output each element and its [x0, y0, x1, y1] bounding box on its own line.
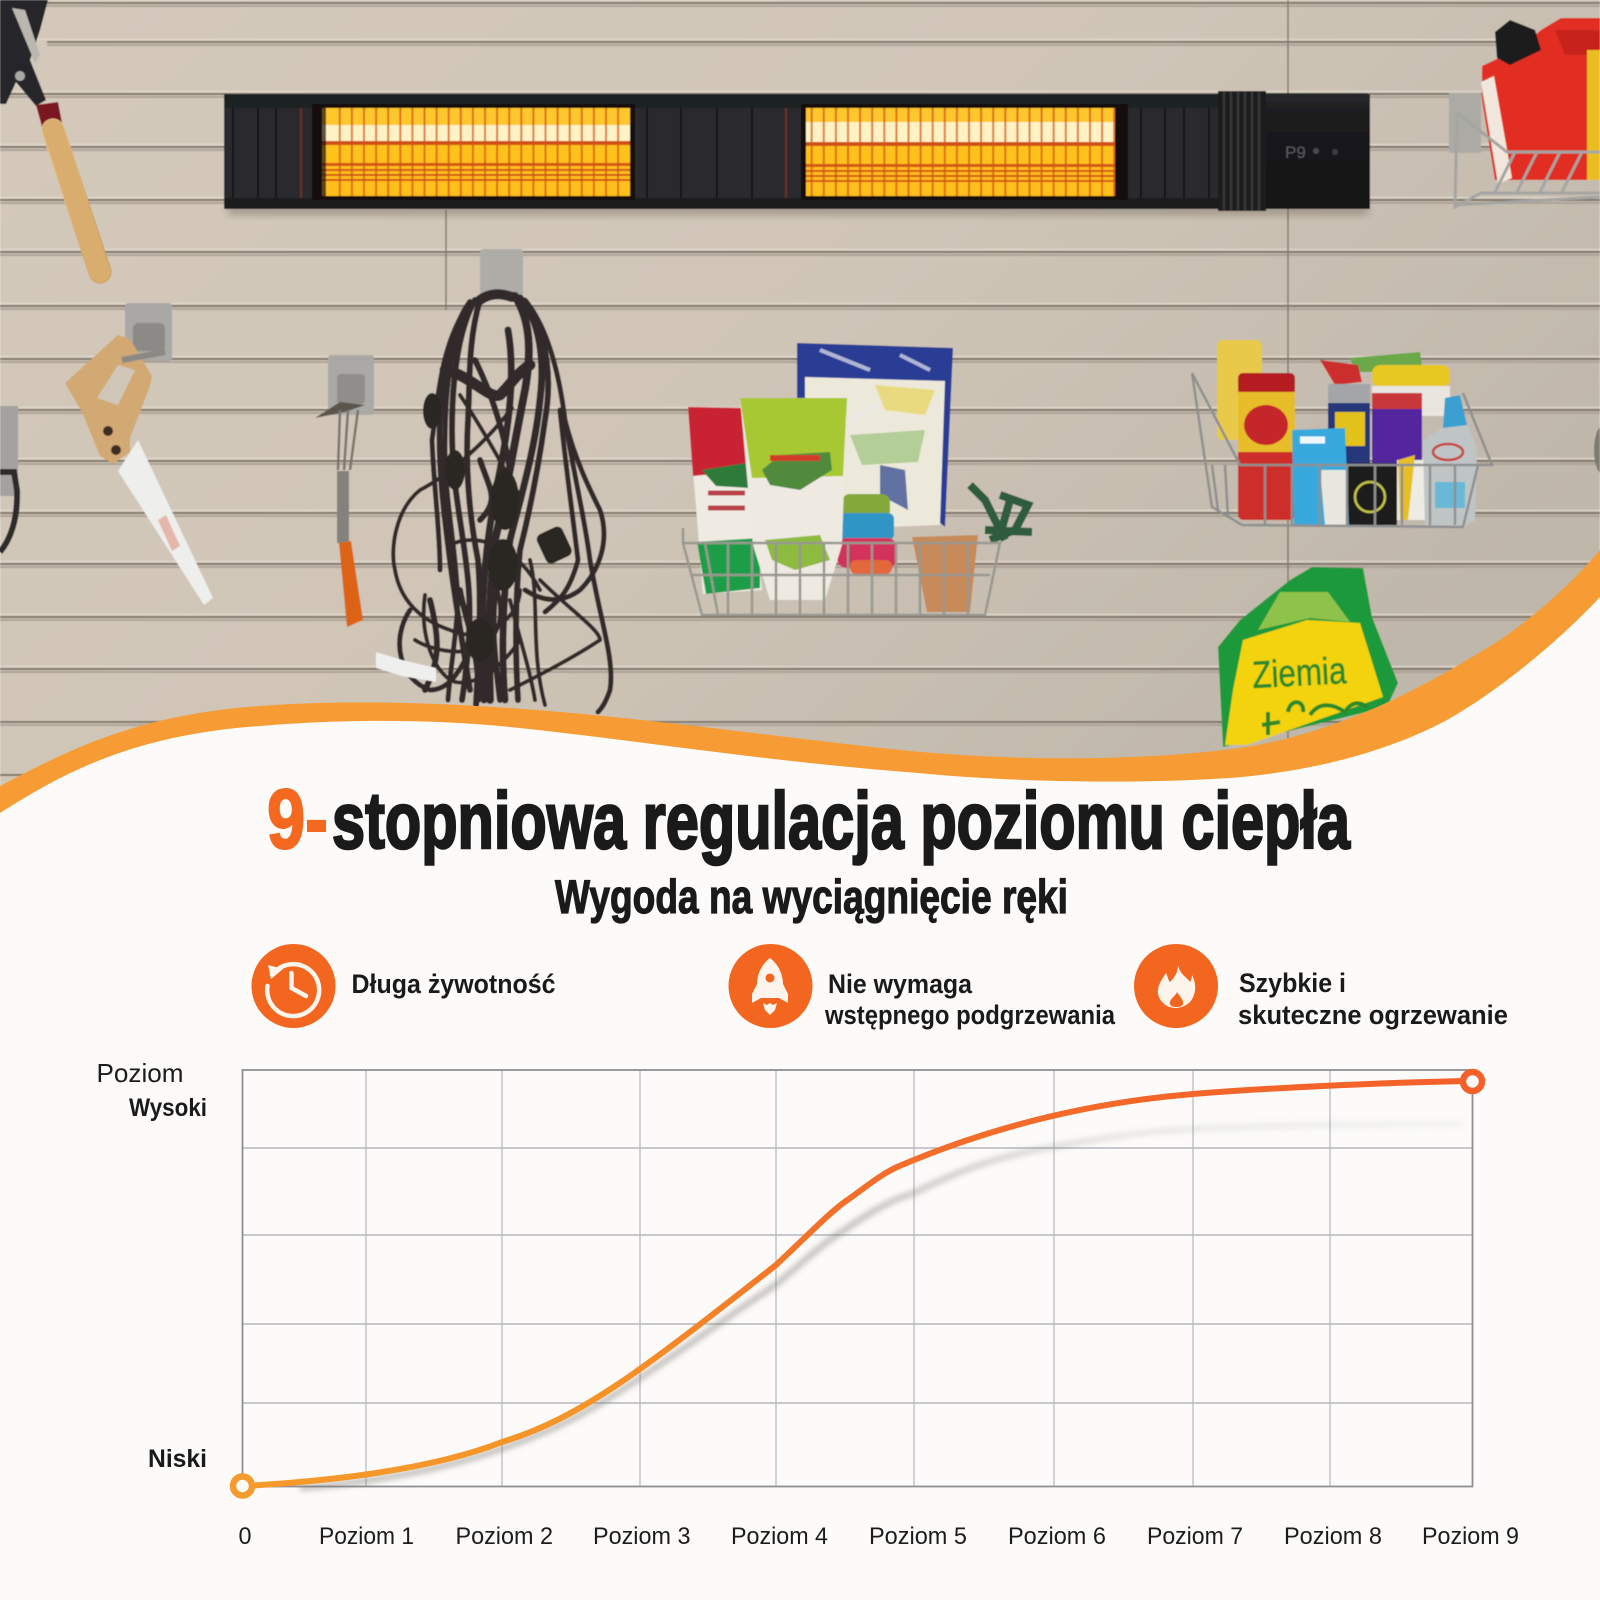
green bag behind basket	[1350, 352, 1423, 372]
feature text line two: wstępnego podgrzewania	[824, 1000, 1116, 1030]
x axis labels: Poziom 6	[1008, 1523, 1106, 1550]
heating element: right	[801, 104, 1128, 200]
start marker	[233, 1476, 252, 1496]
title accent: 9-: 9-	[267, 772, 328, 866]
feature text: Nie wymaga	[828, 969, 973, 999]
heater body	[224, 94, 1370, 209]
extension cable bundle	[376, 249, 611, 712]
infrared heater	[224, 91, 1370, 215]
orange wave band	[0, 550, 1600, 830]
heater shadow	[228, 206, 1368, 215]
bag label: Ziemia	[1251, 650, 1348, 697]
wall panel	[0, 0, 1600, 830]
wire basket with garden packets	[683, 343, 1032, 615]
tool: cultivator on hook	[315, 355, 374, 627]
plastic bottle	[1423, 395, 1477, 527]
packet: blue seed bag	[797, 343, 953, 530]
x axis labels: Poziom 1	[319, 1523, 414, 1550]
blue cleaning box	[1292, 428, 1349, 525]
x axis labels: Poziom 3	[593, 1523, 690, 1550]
chart grid	[242, 1070, 1472, 1486]
green rake head	[970, 485, 1032, 540]
wall bracket at right edge	[1594, 427, 1600, 473]
feature text: Długa żywotność	[352, 969, 556, 999]
green bag of soil	[1218, 567, 1398, 747]
packet: red pouch	[688, 407, 762, 594]
shelf wires	[1455, 113, 1600, 207]
x axis labels: Poziom 9	[1422, 1523, 1519, 1550]
packet: lime pouch	[740, 398, 847, 600]
title	[267, 772, 1350, 866]
x axis labels	[238, 1523, 1519, 1550]
feature text: Szybkie i	[1239, 968, 1346, 998]
tool: bracket and cord at left edge	[0, 406, 18, 552]
can: red-yellow tin	[1238, 373, 1295, 520]
black box	[1347, 463, 1397, 525]
heat curve	[243, 1081, 1472, 1486]
y axis title: Poziom	[96, 1058, 184, 1088]
bowls	[837, 494, 897, 574]
photo: garage slat wall with heater	[0, 0, 1600, 830]
y axis label: low: Niski	[148, 1445, 207, 1473]
ribbed joint	[1218, 91, 1266, 211]
feature: long life	[252, 944, 556, 1028]
subtitle: Wygoda na wyciągnięcie ręki	[555, 870, 1068, 923]
control box: P9	[1285, 143, 1306, 162]
feature: no preheating	[728, 944, 1116, 1030]
wire basket with sprays and cans	[1192, 340, 1492, 527]
curve shadow	[300, 1124, 1463, 1488]
basket wires	[1192, 373, 1492, 527]
icon: rocket	[728, 944, 812, 1028]
tool: garden shears	[0, 0, 100, 272]
x axis labels: Poziom 5	[869, 1523, 967, 1550]
line chart: heat level	[96, 1058, 1519, 1550]
tool: hand saw on hook	[65, 303, 213, 605]
feature text line two: skuteczne ogrzewanie	[1238, 1000, 1508, 1030]
y axis label: high: Wysoki	[129, 1094, 207, 1122]
x axis labels: Poziom 8	[1284, 1523, 1382, 1550]
x axis labels: Poziom 4	[731, 1523, 828, 1550]
x axis labels: Poziom 7	[1147, 1523, 1243, 1550]
white content background wave	[0, 597, 1600, 1600]
can: yellow spray	[1217, 340, 1262, 440]
heating element: left	[312, 104, 635, 200]
feature: fast heating	[1134, 944, 1508, 1030]
x axis labels: Poziom 2	[456, 1523, 553, 1550]
spray can: blue and yellow	[1320, 360, 1370, 465]
fuel can in wire shelf	[1449, 18, 1600, 207]
basket wires	[683, 528, 1000, 615]
wipes tub	[1372, 365, 1450, 520]
end marker	[1463, 1072, 1482, 1091]
icon: clock with arrow	[252, 944, 336, 1028]
x axis labels: 0	[238, 1523, 252, 1550]
icon: flame	[1134, 944, 1218, 1028]
control box	[1266, 93, 1370, 209]
clay pot	[912, 535, 978, 612]
